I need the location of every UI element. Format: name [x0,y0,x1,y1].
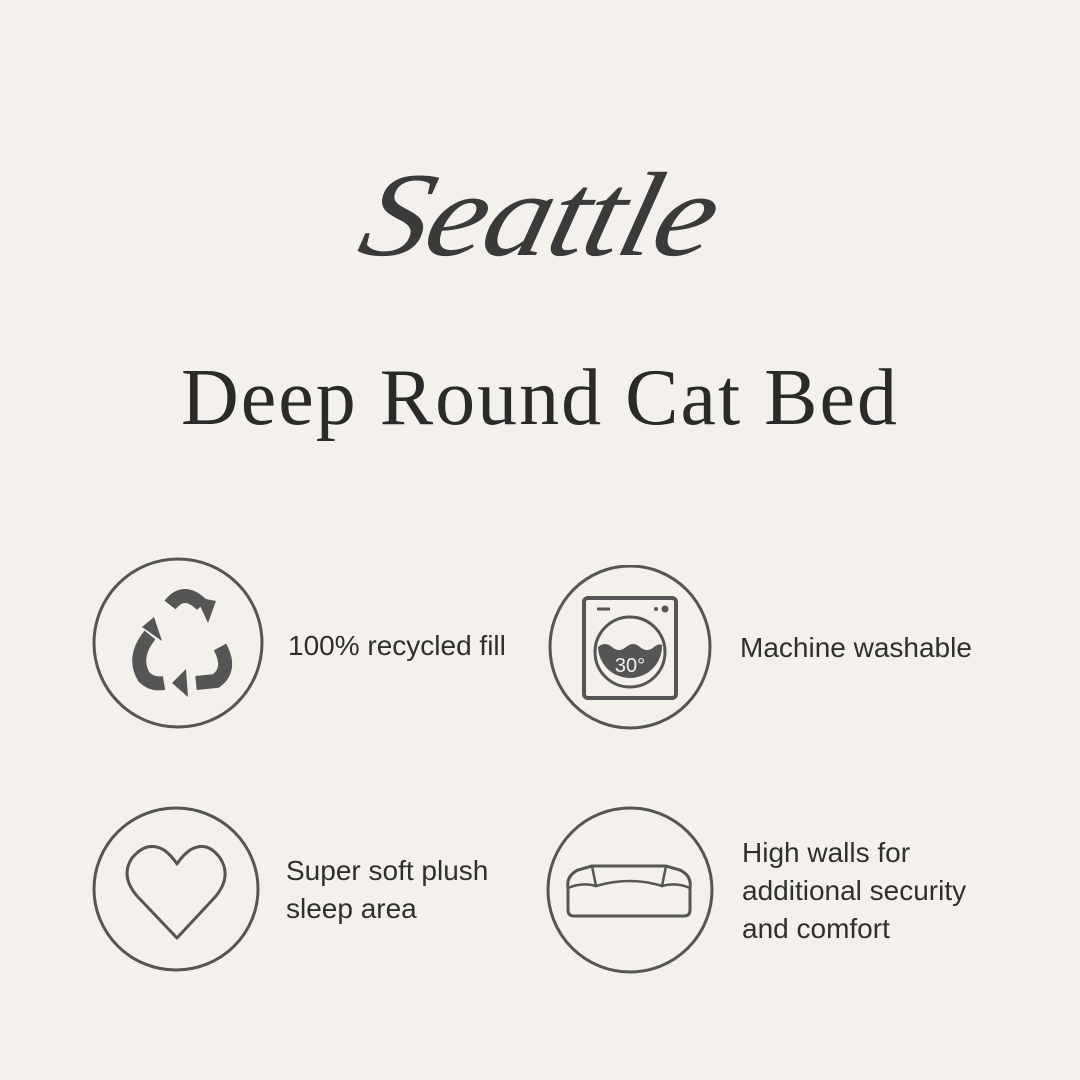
label: High walls for [742,837,910,868]
icon: washing machine: 30° [615,655,645,677]
label: Super soft plush [286,855,488,886]
label: Machine washable [740,632,972,663]
feature: machine washable [548,565,972,730]
icon: cat bed [546,806,714,974]
icon: recycle [92,558,264,728]
label: additional security [742,875,966,906]
label [286,855,488,924]
icon: heart [92,806,260,972]
icon: washing machine [548,565,712,730]
label [742,837,966,944]
label: 100% recycled fill [288,630,506,661]
script title: Seattle: Seattle [349,148,732,281]
heading: product name: Deep Round Cat Bed [181,354,899,442]
feature: soft plush [92,806,488,972]
feature: recycled fill [92,558,506,728]
feature: high walls [546,806,966,974]
label: and comfort [742,913,890,944]
label: sleep area [286,893,417,924]
